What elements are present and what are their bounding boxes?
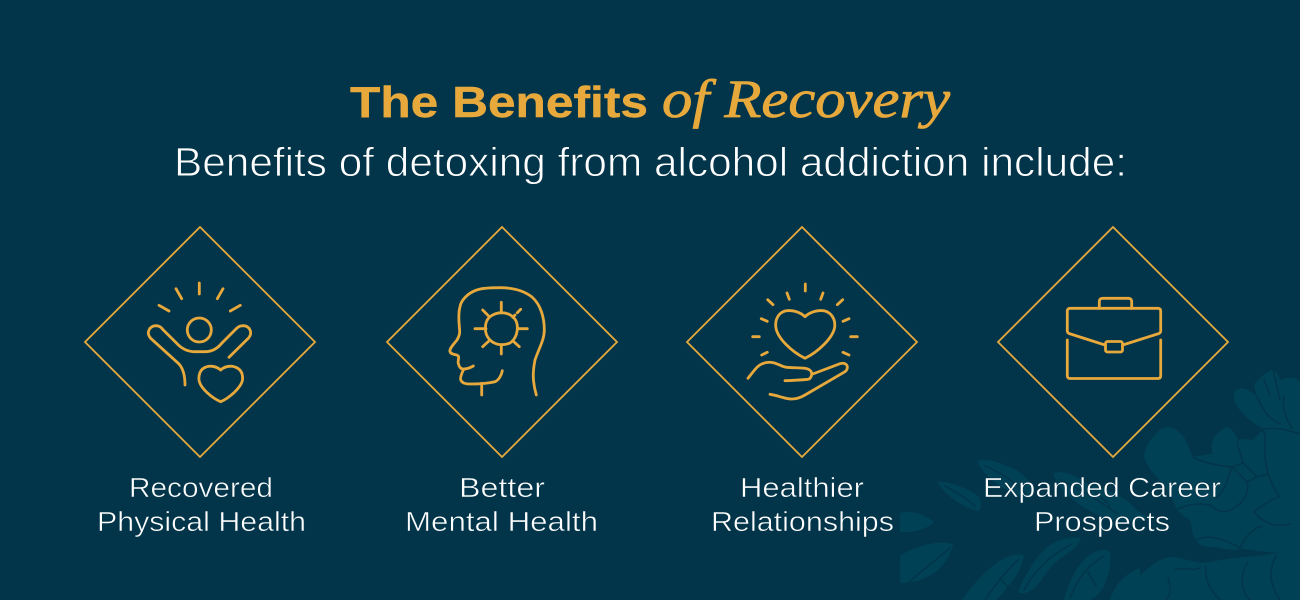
diamond frame 2	[387, 227, 617, 457]
label	[711, 472, 894, 537]
diamond frame 4	[998, 227, 1228, 457]
icon: briefcase	[1067, 298, 1161, 378]
diamond frame 3	[687, 227, 917, 457]
label	[983, 472, 1221, 537]
panel: expanded career prospects	[983, 227, 1228, 537]
title: The Benefits	[350, 78, 648, 127]
label: Physical Health	[97, 506, 306, 537]
subtitle: Benefits of detoxing from alcohol addiction include:	[174, 139, 1127, 185]
icon: hand holding heart	[748, 284, 857, 399]
panel: recovered physical health	[85, 227, 315, 537]
label: Mental Health	[405, 506, 598, 537]
panel: healthier relationships	[687, 227, 917, 537]
label: Better	[459, 472, 545, 503]
icon: head with sun	[450, 288, 544, 395]
title: of Recovery	[662, 69, 950, 129]
label: Recovered	[129, 472, 273, 503]
label: Prospects	[1034, 506, 1170, 537]
label: Healthier	[740, 472, 864, 503]
label: Relationships	[711, 506, 894, 537]
panel: better mental health	[387, 227, 617, 537]
label	[405, 472, 598, 537]
label: Expanded Career	[983, 472, 1221, 503]
title	[350, 69, 950, 129]
icon: person with heart	[148, 283, 251, 402]
floral watermark	[900, 370, 1300, 600]
label	[97, 472, 306, 537]
diamond frame 1	[85, 227, 315, 457]
